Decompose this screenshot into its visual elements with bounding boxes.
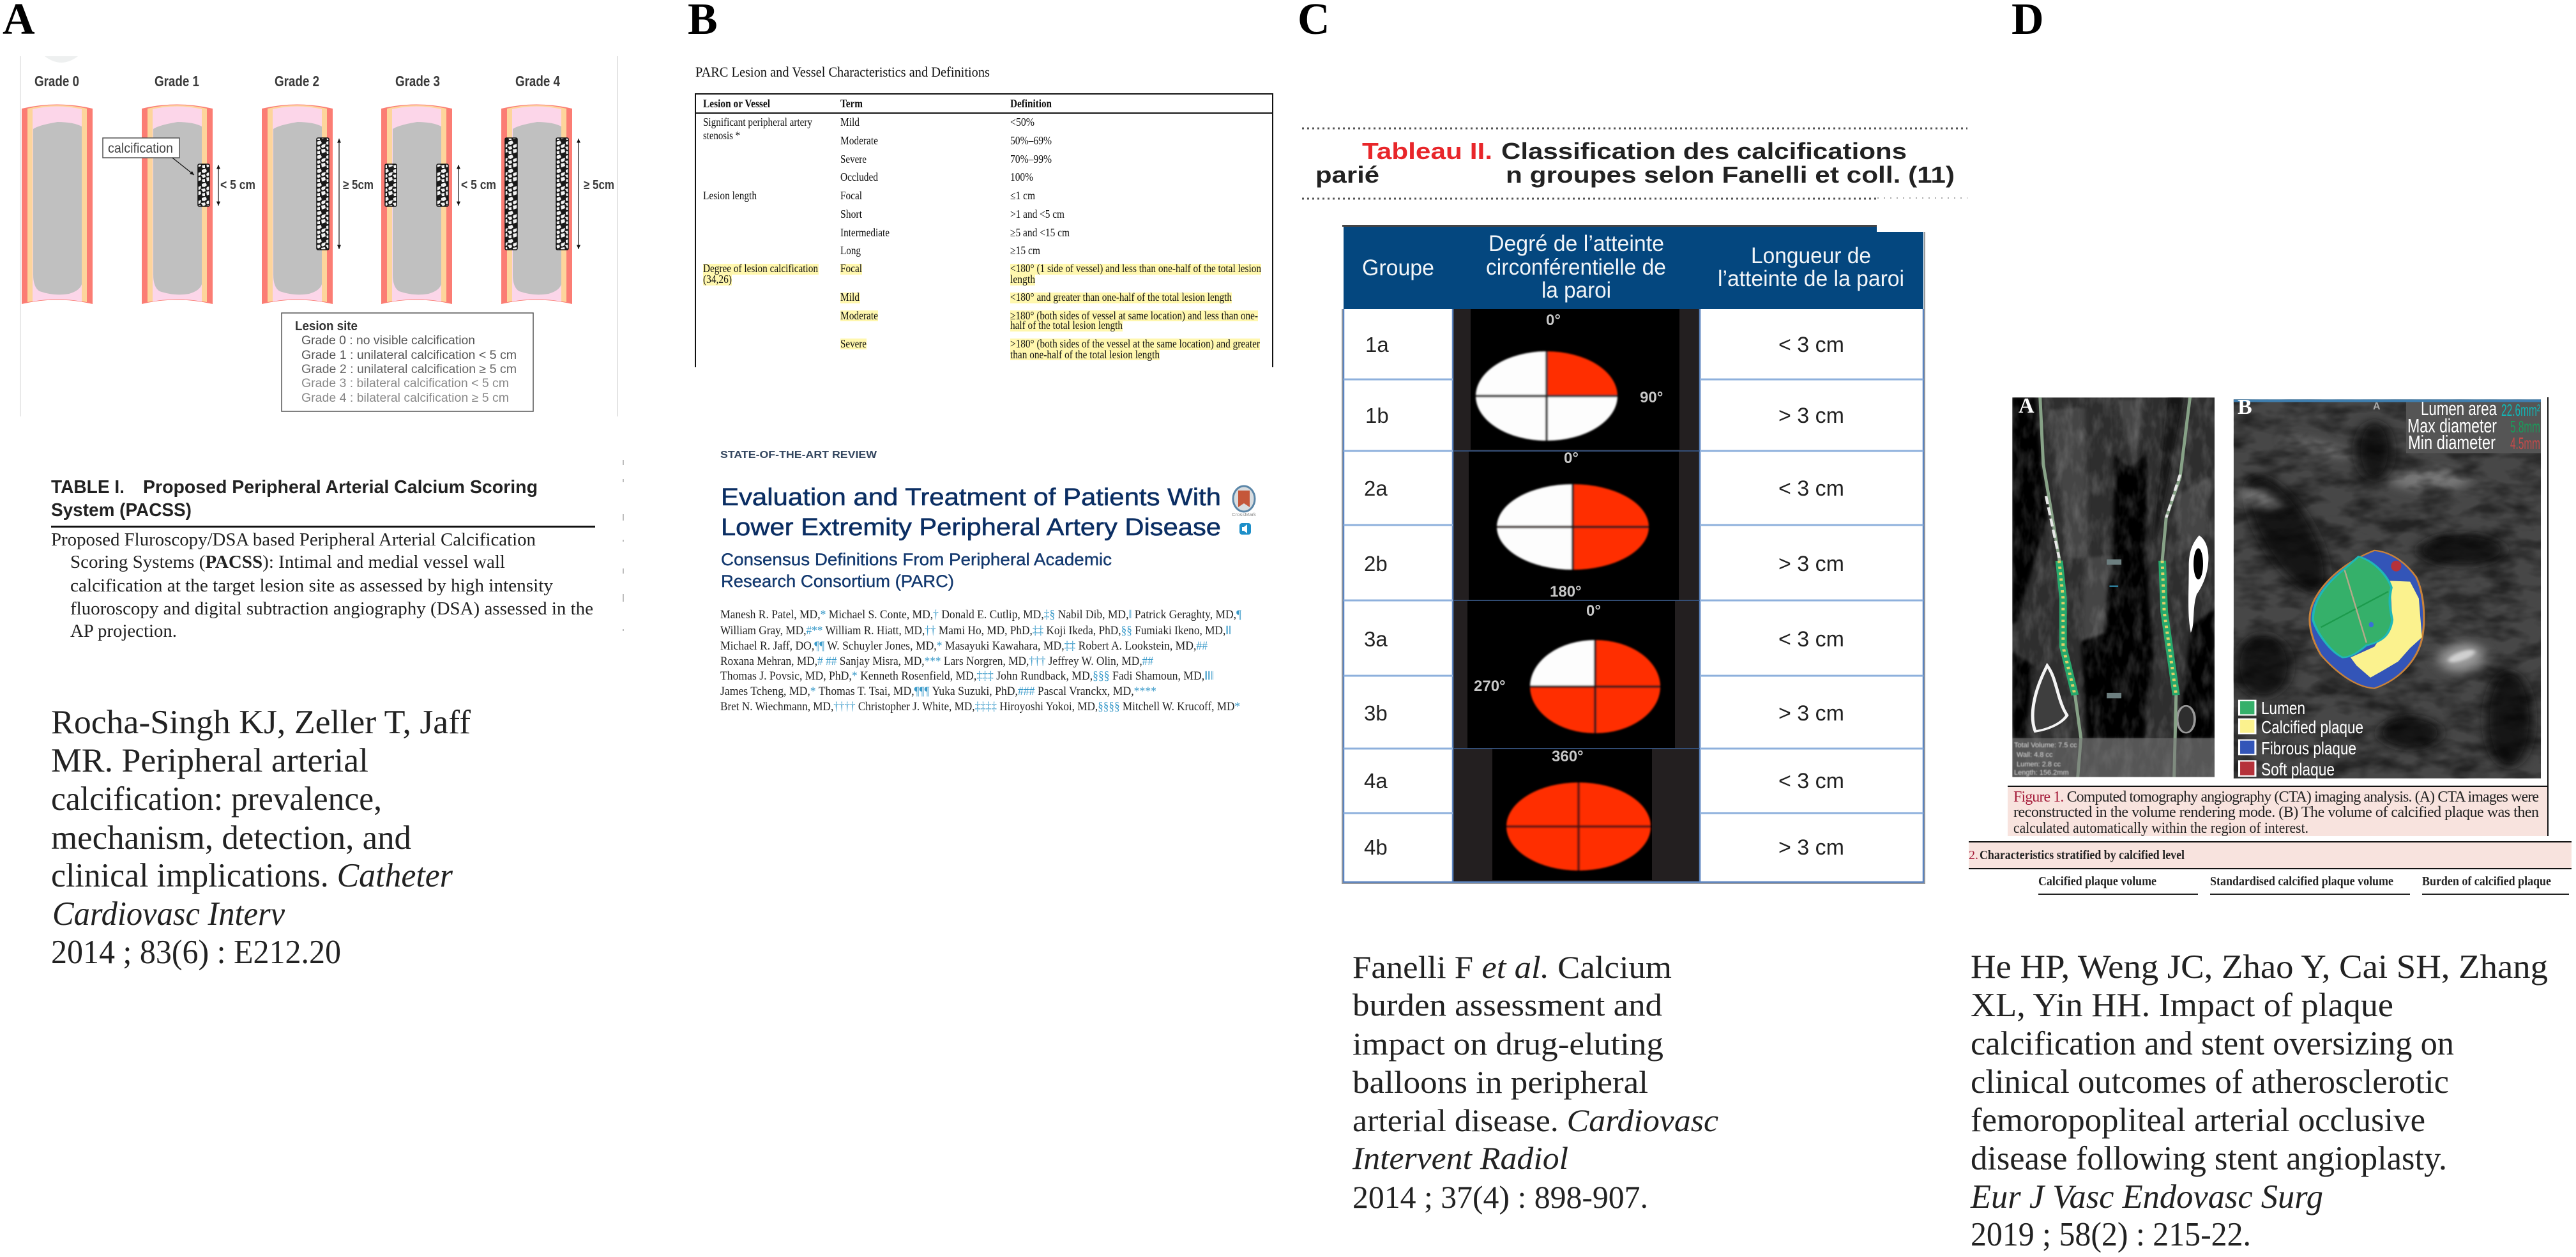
measurements: Lumen area [2421,397,2497,420]
table I body [51,529,593,641]
measurements: 5.8mm [2510,417,2540,436]
panel D: table 2 header: Calcified plaque volume [2038,874,2156,888]
table header text: Longueur de [1751,243,1871,268]
length labels: ≥ 5cm [584,178,614,192]
panel D: table 2 header: Burden of calcified plaque [2422,874,2551,888]
citation C: arterial disease. Cardiovasc [1352,1102,1718,1138]
vessels [2040,397,2081,777]
citation A [51,704,471,971]
panel D: table 2 header [1969,841,2572,895]
citation A: mechanism, detection, and [51,819,411,857]
citation A: calcification: prevalence, [51,781,382,818]
diagram: group 1, 90 degrees: 0° [1546,312,1561,329]
citation A: MR. Peripheral arterial [51,742,368,779]
citation D: clinical outcomes of atherosclerotic [1971,1063,2449,1101]
table header text: Degré de l’atteinte [1489,231,1664,256]
panel B: PARC definitions table [695,64,1273,367]
image letter B: B [2238,395,2252,419]
citation D: femoropopliteal arterial occlusive [1971,1102,2425,1139]
citation C: 2014 ; 37(4) : 898-907. [1352,1179,1648,1215]
table column 1 [703,116,818,286]
length labels: ≥ 5cm [343,178,374,192]
citation C: impact on drug-eluting [1352,1026,1663,1062]
table column 2: Mild [840,291,860,303]
diagram: group 3, 270 degrees: 0° [1586,602,1601,620]
citation D: Eur J Vasc Endovasc Surg [1970,1178,2323,1215]
group labels: 3a [1364,627,1388,651]
group labels: 4a [1364,769,1388,793]
grade headings [34,73,560,89]
diagram: group 2, 180 degrees: 0° [1564,450,1579,467]
length values: < 3 cm [1778,627,1844,651]
table header: Lesion or Vessel [703,97,770,110]
table I heading: TABLE I. [51,477,125,498]
volume readout: Lumen: 2.8 cc [2017,761,2061,768]
citation D: XL, Yin HH. Impact of plaque [1971,987,2393,1024]
table column 3: length [1010,273,1035,286]
measurements: Max diameter [2407,415,2497,437]
citation C: balloons in peripheral [1352,1064,1648,1100]
author list: Bret N. Wiechmann, MD,†††† Christopher J. White, MD,‡‡‡‡ Hiroyoshi Yokoi, MD,§§§§ Mitchell W. Krucoff, MD* [720,700,1240,713]
panel C: classification table [1342,225,1925,883]
table frame [1342,225,1925,883]
author list: Roxana Mehran, MD,# ## Sanjay Misra, MD,*** Lars Norgren, MD,††† Jeffrey W. Olin, MD,## [720,655,1153,668]
legend labels: Lumen [2261,698,2305,718]
table column 2 [840,116,890,350]
table header: Definition [1010,97,1052,110]
yellow highlights [703,264,1261,360]
panel D: CTA image B [2230,395,2541,779]
table header text: la paroi [1542,278,1611,303]
author list: William Gray, MD,#** William R. Hiatt, MD,†† Mami Ho, MD, PhD,‡‡ Koji Ikeda, PhD,§§ Fumiaki Ikeno, MD,‖‖ [720,624,1232,637]
table column 2: Focal [840,189,862,202]
author list: Thomas J. Povsic, MD, PhD,* Kenneth Rosenfield, MD,‡‡‡ John Rundback, MD,§§§ Fadi Shamoun, MD,‖‖‖ [720,669,1214,683]
table column 3: <50% [1010,116,1034,128]
panel B: article header [720,450,1257,713]
group labels: 4b [1364,835,1388,859]
panel D: figure caption: reconstructed in the volume rendering mode. (B) The volume of calcified plaque was then [2013,804,2539,821]
group labels [1364,333,1389,859]
length values: > 3 cm [1778,552,1844,576]
citation D: disease following stent angioplasty. [1971,1140,2447,1177]
table column 3: 50%–69% [1010,134,1052,147]
table I body: calcification at the target lesion site as assessed by high intensity [70,575,553,596]
table column 3: 100% [1010,171,1033,183]
length values [1778,333,1844,860]
author list: Michael R. Jaff, DO,¶¶ W. Schuyler Jones, MD,* Masayuki Kawahara, MD,‡‡ Robert A. Lookstein, MD,## [720,639,1208,653]
table I body: AP projection. [70,621,177,641]
table column 3: >1 and <5 cm [1010,208,1064,220]
length labels: < 5 cm [220,178,255,192]
panel D: table 2 header: Characteristics stratified by calcified level [1980,848,2185,862]
diagram: group 1, 90 degrees [1471,309,1679,450]
diagram: group 2, 180 degrees [1469,450,1679,600]
panel C: table heading: Classification des calcifications [1501,138,1907,164]
table column 3: than one-half of the total lesion length [1010,348,1160,361]
table column 2: Short [840,208,862,220]
citation D [1970,948,2548,1253]
author list [720,608,1241,713]
diagram: group 3, 270 degrees [1467,601,1675,748]
legend labels [2261,698,2363,779]
table header text: l’atteinte de la paroi [1718,266,1904,291]
panel C: table heading: parié [1315,162,1379,188]
table column 3: ≥5 and <15 cm [1010,226,1070,239]
table column 2: Severe [840,153,867,165]
grade headings: Grade 4 [515,73,560,89]
table column 2: Intermediate [840,226,890,239]
diagram: group 4, 360 degrees: 360° [1552,748,1584,765]
volume readout: Total Volume: 7.5 cc [2014,742,2077,749]
bone outlines [2188,535,2208,633]
grade headings: Grade 3 [395,73,440,89]
plaque cross-section [2310,551,2424,689]
table column 1: Significant peripheral artery [703,116,812,128]
table column 2: Focal [840,262,862,275]
legend: lesion site: Lesion site [295,319,358,333]
table title: PARC Lesion and Vessel Characteristics and Definitions [695,64,990,80]
group labels: 2b [1364,552,1388,575]
panel D: figure caption [2008,397,2549,837]
article subtitle: Consensus Definitions From Peripheral Academic [721,550,1112,569]
vessels [22,105,572,304]
table I heading: System (PACSS) [51,500,192,521]
panel A: PACSS grades diagram [20,56,617,416]
legend: lesion site [282,313,533,411]
table column 2: Moderate [840,134,878,147]
citation A: 2014 ; 83(6) : E212.20 [51,934,341,971]
table column 2: Long [840,244,861,257]
table column 2: Occluded [840,171,878,183]
citation A: Rocha-Singh KJ, Zeller T, Jaff [51,704,471,741]
table header [703,97,1052,110]
citation D: He HP, Weng JC, Zhao Y, Cai SH, Zhang [1971,948,2548,986]
table column 3: <180° (1 side of vessel) and less than one-half of the total lesion [1010,262,1261,275]
volume readout: Length: 156.2mm [2014,769,2069,777]
table I heading [51,477,538,521]
length values: < 3 cm [1778,476,1844,501]
calcified hot spot [2431,637,2492,677]
legend labels: Soft plaque [2261,759,2335,779]
measurements: 22.6mm² [2501,400,2540,420]
diagram: group 2, 180 degrees: 180° [1550,583,1582,600]
author list: James Tcheng, MD,* Thomas T. Tsai, MD,¶¶¶ Yuka Suzuki, PhD,### Pascal Vranckx, MD,**** [720,685,1156,698]
table column 3: <180° and greater than one-half of the total lesion length [1010,291,1232,303]
legend labels: Fibrous plaque [2261,738,2356,758]
orientation mark: A [2373,401,2381,412]
length labels: < 5 cm [461,178,496,192]
table column 1: (34,26) [703,273,732,286]
legend swatches [2239,701,2255,776]
panel C: table heading [1302,128,1967,199]
table I body: fluoroscopy and digital subtraction angiography (DSA) assessed in the [70,598,593,619]
article subtitle [721,550,1112,591]
panel C: table heading: Tableau II. [1362,138,1492,164]
panel D: table 2 header: 2. [1969,848,1978,862]
table I body: Proposed Fluroscopy/DSA based Peripheral Arterial Calcification [51,529,536,550]
table header text: circonférentielle de [1486,255,1666,280]
volume readout: Wall: 4.8 cc [2017,751,2053,759]
citation D: 2019 ; 58(2) : 215-22. [1971,1216,2251,1253]
measurements: Min diameter [2408,431,2496,453]
table header: Term [840,97,863,110]
citation C [1352,949,1718,1215]
length values: < 3 cm [1778,333,1844,357]
volume band [2012,738,2215,777]
legend: lesion site: Grade 2 : unilateral calcification ≥ 5 cm [301,363,517,376]
table column 2: Severe [840,337,867,350]
citation A: clinical implications. Catheter [51,857,453,894]
article title: Lower Extremity Peripheral Artery Disease [721,514,1221,541]
table column 1: Degree of lesion calcification [703,262,818,275]
table header text: Groupe [1362,255,1434,280]
diagram: group 4, 360 degrees [1492,748,1652,880]
table column 1: stenosis * [703,129,740,142]
icon: crossmark: CrossMark [1232,513,1257,517]
table column 3: ≥15 cm [1010,244,1040,257]
citation D: calcification and stent oversizing on [1971,1025,2454,1062]
volume readout [2014,742,2077,777]
table column 2: Mild [840,116,860,128]
callout: calcification: calcification [108,141,173,156]
citation C: Fanelli F et al. Calcium [1352,949,1672,985]
table column 3: >180° (both sides of the vessel at the same location) and greater [1010,337,1260,351]
article title [721,484,1221,541]
author list: Manesh R. Patel, MD,* Michael S. Conte, MD,† Donald E. Cutlip, MD,‡§ Nabil Dib, MD,‖ Patrick Geraghty, MD,¶ [720,608,1241,621]
group labels: 1a [1365,333,1389,356]
article subtitle: Research Consortium (PARC) [721,572,954,591]
panel D: figure caption: calculated automatically within the region of interest. [2013,820,2308,837]
citation C: burden assessment and [1352,987,1662,1023]
length labels [220,178,614,192]
table column 3: ≤1 cm [1010,189,1035,202]
table column 3: 70%–99% [1010,153,1052,165]
panel D: table 2 header: Standardised calcified plaque volume [2210,874,2393,888]
calcification patches [198,138,568,250]
legend labels: Calcified plaque [2261,717,2363,737]
callout: calcification [103,138,194,175]
article title: Evaluation and Treatment of Patients With [721,484,1221,511]
panel D: CTA image A [2012,394,2215,777]
group labels: 3b [1364,701,1388,725]
table column 1: Lesion length [703,189,757,202]
panel D: figure caption: Figure 1. Computed tomography angiography (CTA) imaging analysis. (A) CTA images were [2013,789,2539,805]
legend: lesion site: Grade 3 : bilateral calcification < 5 cm [301,377,509,390]
column 2 background [1453,309,1700,881]
diagram: group 3, 270 degrees: 270° [1474,678,1506,695]
icon: crossmark [1232,486,1257,517]
length values: > 3 cm [1778,835,1844,860]
panel C: table heading: n groupes selon Fanelli et coll. (11) [1506,162,1955,188]
measurements [2407,397,2540,453]
legend: lesion site: Grade 1 : unilateral calcification < 5 cm [301,349,517,362]
citation A: Cardiovasc Interv [52,895,285,933]
length arrows [218,139,579,249]
measure tags [2107,560,2121,698]
measurements: 4.5mm [2510,434,2540,453]
table column 3 [1010,116,1261,361]
length values: < 3 cm [1778,769,1844,793]
grade headings: Grade 1 [155,73,199,89]
article kicker: STATE-OF-THE-ART REVIEW [720,450,877,461]
table I body: Scoring Systems (PACSS): Intimal and medial vessel wall [70,552,505,572]
table header text [1362,231,1904,303]
image letter A: A [2019,394,2034,418]
table I heading: Proposed Peripheral Arterial Calcium Scoring [143,477,538,498]
table column 3: ≥180° (both sides of vessel at same location) and less than one- [1010,309,1258,323]
grade headings: Grade 0 [34,73,79,89]
citation C: Intervent Radiol [1352,1140,1568,1176]
table column 2: Moderate [840,309,878,322]
length values: > 3 cm [1778,404,1844,428]
length values: > 3 cm [1778,701,1844,726]
icon: speaker [1239,523,1251,535]
legend: lesion site: Grade 0 : no visible calcification [301,334,475,347]
diagram: group 1, 90 degrees: 90° [1640,389,1663,406]
panel A: Table I definition [51,460,624,641]
table grid [1344,309,1923,882]
legend: lesion site: Grade 4 : bilateral calcification ≥ 5 cm [301,392,509,405]
group labels: 1b [1365,404,1389,427]
table column 3: half of the total lesion length [1010,319,1123,331]
grade headings: Grade 2 [275,73,319,89]
group labels: 2a [1364,476,1388,500]
